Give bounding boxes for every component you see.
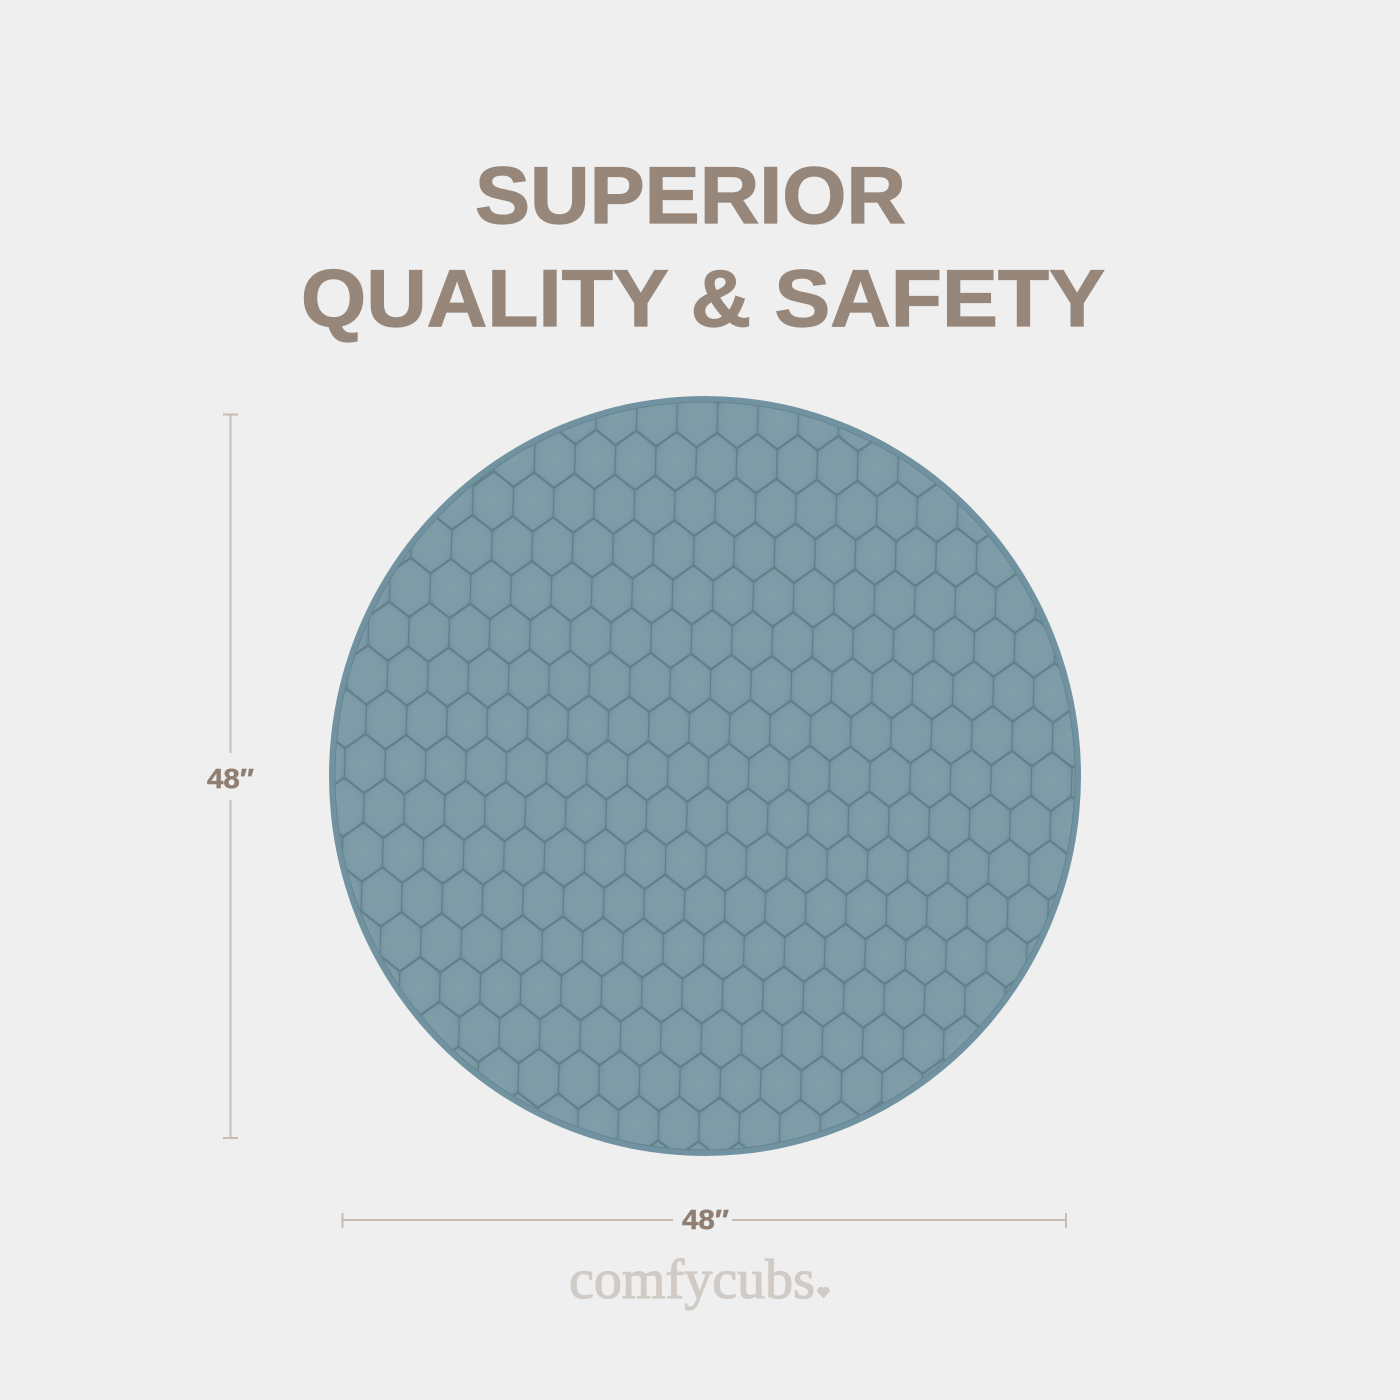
title [301, 151, 1105, 344]
brand logo: comfycubs [569, 1249, 815, 1311]
title: QUALITY & SAFETY [301, 254, 1105, 344]
width dimension line [342, 1213, 1066, 1228]
quilted round play mat [329, 396, 1081, 1156]
height label: 48″ [207, 763, 254, 794]
width label: 48″ [682, 1204, 729, 1235]
height dimension line [223, 414, 238, 1138]
title: SUPERIOR [475, 151, 906, 241]
